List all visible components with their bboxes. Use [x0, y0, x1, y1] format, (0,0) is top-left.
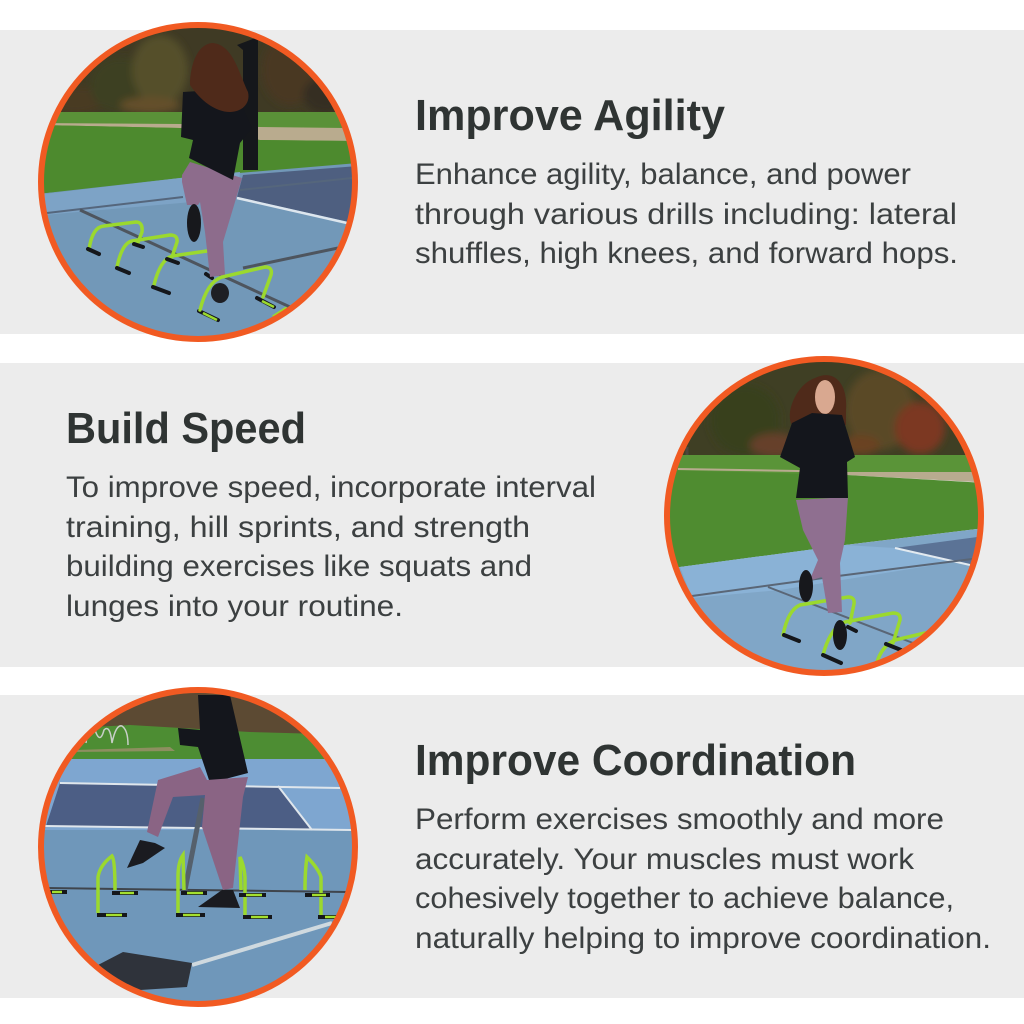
text block: coordination description: accurately. Your muscles must work	[415, 843, 915, 876]
text block: speed description	[66, 471, 596, 623]
text block: coordination description: naturally helping to improve coordination.	[415, 922, 991, 955]
text block: agility description: shuffles, high knees, and forward hops.	[415, 237, 958, 270]
bike rack	[86, 726, 128, 745]
text block: speed description: training, hill sprints, and strength	[66, 511, 530, 544]
person	[178, 695, 248, 783]
text block: agility description: through various drills including: lateral	[415, 198, 957, 231]
text block: coordination description: Perform exercises smoothly and more	[415, 803, 944, 836]
bag	[98, 952, 192, 990]
photo: woman running through hurdles	[664, 355, 985, 680]
text block: speed description: To improve speed, incorporate interval	[66, 471, 596, 504]
heading: improve agility: Improve Agility	[415, 91, 726, 140]
panel: improve agility	[0, 20, 1024, 345]
heading: improve coordination: Improve Coordination	[415, 736, 856, 785]
text block: agility description	[415, 158, 958, 270]
hurdles	[89, 222, 207, 285]
panel: build speed	[0, 355, 1024, 680]
text block: coordination description: cohesively together to achieve balance,	[415, 882, 954, 915]
person	[182, 162, 242, 277]
text block: speed description: building exercises like squats and	[66, 550, 532, 583]
hurdles	[98, 855, 321, 915]
text block: agility description: Enhance agility, balance, and power	[415, 158, 911, 191]
person	[790, 375, 846, 425]
heading: build speed: Build Speed	[66, 404, 306, 453]
text block: speed description: lunges into your routine.	[66, 590, 403, 623]
photo: woman stepping over a row of hurdles	[38, 685, 358, 1009]
text block: coordination description	[415, 803, 991, 955]
panel: improve coordination	[0, 685, 1024, 1009]
photo: woman jumping over agility hurdles	[38, 20, 358, 345]
front hurdle	[200, 267, 271, 310]
hurdles	[783, 597, 925, 662]
